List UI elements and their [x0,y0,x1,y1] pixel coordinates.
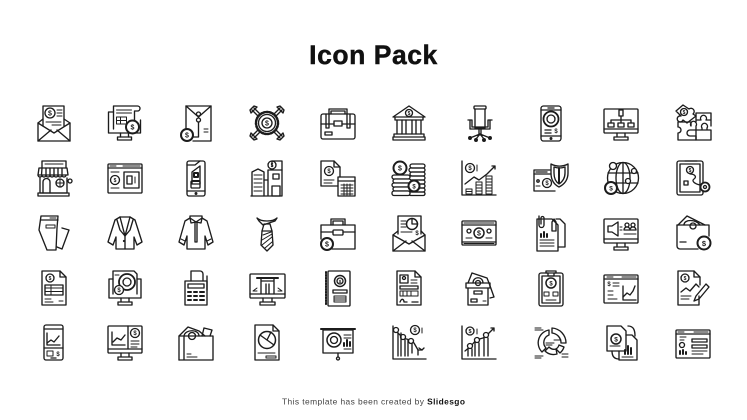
icon: envelope with invoice [38,106,70,141]
icon: puzzle with coin: $ [683,110,686,116]
icon: buildings with coin [251,161,282,196]
icon: bank: $ [408,111,411,117]
icon: bank [393,106,425,140]
icon: monitor with document and coin: $ [131,124,135,132]
icon: envelope with pie report: $ [415,231,419,237]
icon: monitor with org chart [604,109,638,140]
icon: invoice document [42,271,66,305]
icon: growth chart with coins: $ [468,166,472,172]
icon: phone with chart: $ [56,352,60,358]
icon: wallet with money [677,216,710,250]
icon: shirt [179,216,213,249]
icon: briefcase [321,109,355,139]
icon: coin with four arrows: $ [265,120,269,128]
icon: monitor with ATM [250,274,285,305]
icon: phone with gauge [541,106,561,141]
icon: report with pencil: $ [684,276,687,282]
icon: browser with line chart: $ [607,282,611,288]
icon: coin stacks: $ [398,166,402,172]
icon: browser with line chart [604,275,638,303]
icon: briefcase with coin: $ [325,242,329,248]
icon: report with pencil [678,271,709,305]
icon: phone with gauge: $ [554,129,558,135]
icon: phone with card [187,161,205,196]
icon: necktie [257,218,277,251]
icon: invoice document: $ [49,276,52,282]
icon: browser with shield: $ [545,181,549,187]
icon: trousers [39,216,69,250]
title: Icon Pack [309,40,438,70]
icon: phone with chart [44,325,63,360]
icon: monitor with megaphone [604,219,638,250]
icon: suit jacket [108,217,142,249]
icon: wallet with money: $ [702,239,707,248]
icon: spiral notebook: $ [339,279,342,284]
icon: presentation board [321,329,355,360]
icon: browser with safe [108,164,142,193]
icon: browser with safe: $ [114,178,117,184]
icon: monitor with chart and coin [108,326,142,360]
icon: clipboard with map: $ [689,168,692,174]
icon: banknote: $ [477,230,481,238]
icon: falling chart [393,326,426,359]
icon: briefcase with coin [321,219,355,250]
icon: globe with pins: $ [609,186,613,192]
icon: profile document [397,271,421,305]
icon: envelope with invoice: $ [48,110,52,118]
icon: coin stacks: $ [412,184,416,190]
icon: rising chart: $ [468,329,472,335]
icon: envelope with pie report [393,216,425,251]
icon: coin stacks [392,162,425,196]
icon: spiral notebook [326,271,350,306]
icon: clipboard with coin [539,271,563,306]
icon: coin with four arrows [250,106,284,140]
icon: falling chart: $ [413,328,417,334]
icon: monitor with pie chart: $ [117,288,121,294]
icon: rising chart [462,326,496,359]
icon: clipboard with map [677,161,710,195]
icon: shop [38,161,72,196]
icon: document with pie [255,325,279,360]
icon: exchanging documents [607,326,637,360]
icon: document with calendar [321,161,355,196]
icon: buildings with coin: $ [271,163,274,169]
icon: folder with money [179,327,213,360]
icon: puzzle with coin [676,105,711,140]
icon: monitor with chart and coin: $ [133,331,137,337]
footer credit: This template has been created by Slidesgo [282,396,465,406]
icon: exchanging documents: $ [614,336,618,344]
icon: office chair [468,106,492,141]
icon: string envelope with coin: $ [185,132,189,140]
icon: growth chart with coins [462,161,496,195]
icon: globe with pins [605,162,638,194]
icon: browser with dashboard [676,330,710,358]
icon: box with money [466,273,494,305]
icon: clipped reports [537,216,565,251]
icon: monitor with document and coin [108,106,140,140]
icon: monitor with pie chart [109,271,141,305]
icon: clipboard with coin: $ [549,282,553,288]
icon: string envelope with coin [181,106,211,141]
icon: adding machine [185,271,207,305]
icon: donut chart [535,328,568,358]
icon: document with calendar: $ [327,169,331,175]
icon: browser with shield [534,164,568,191]
icon: banknote [462,221,496,245]
